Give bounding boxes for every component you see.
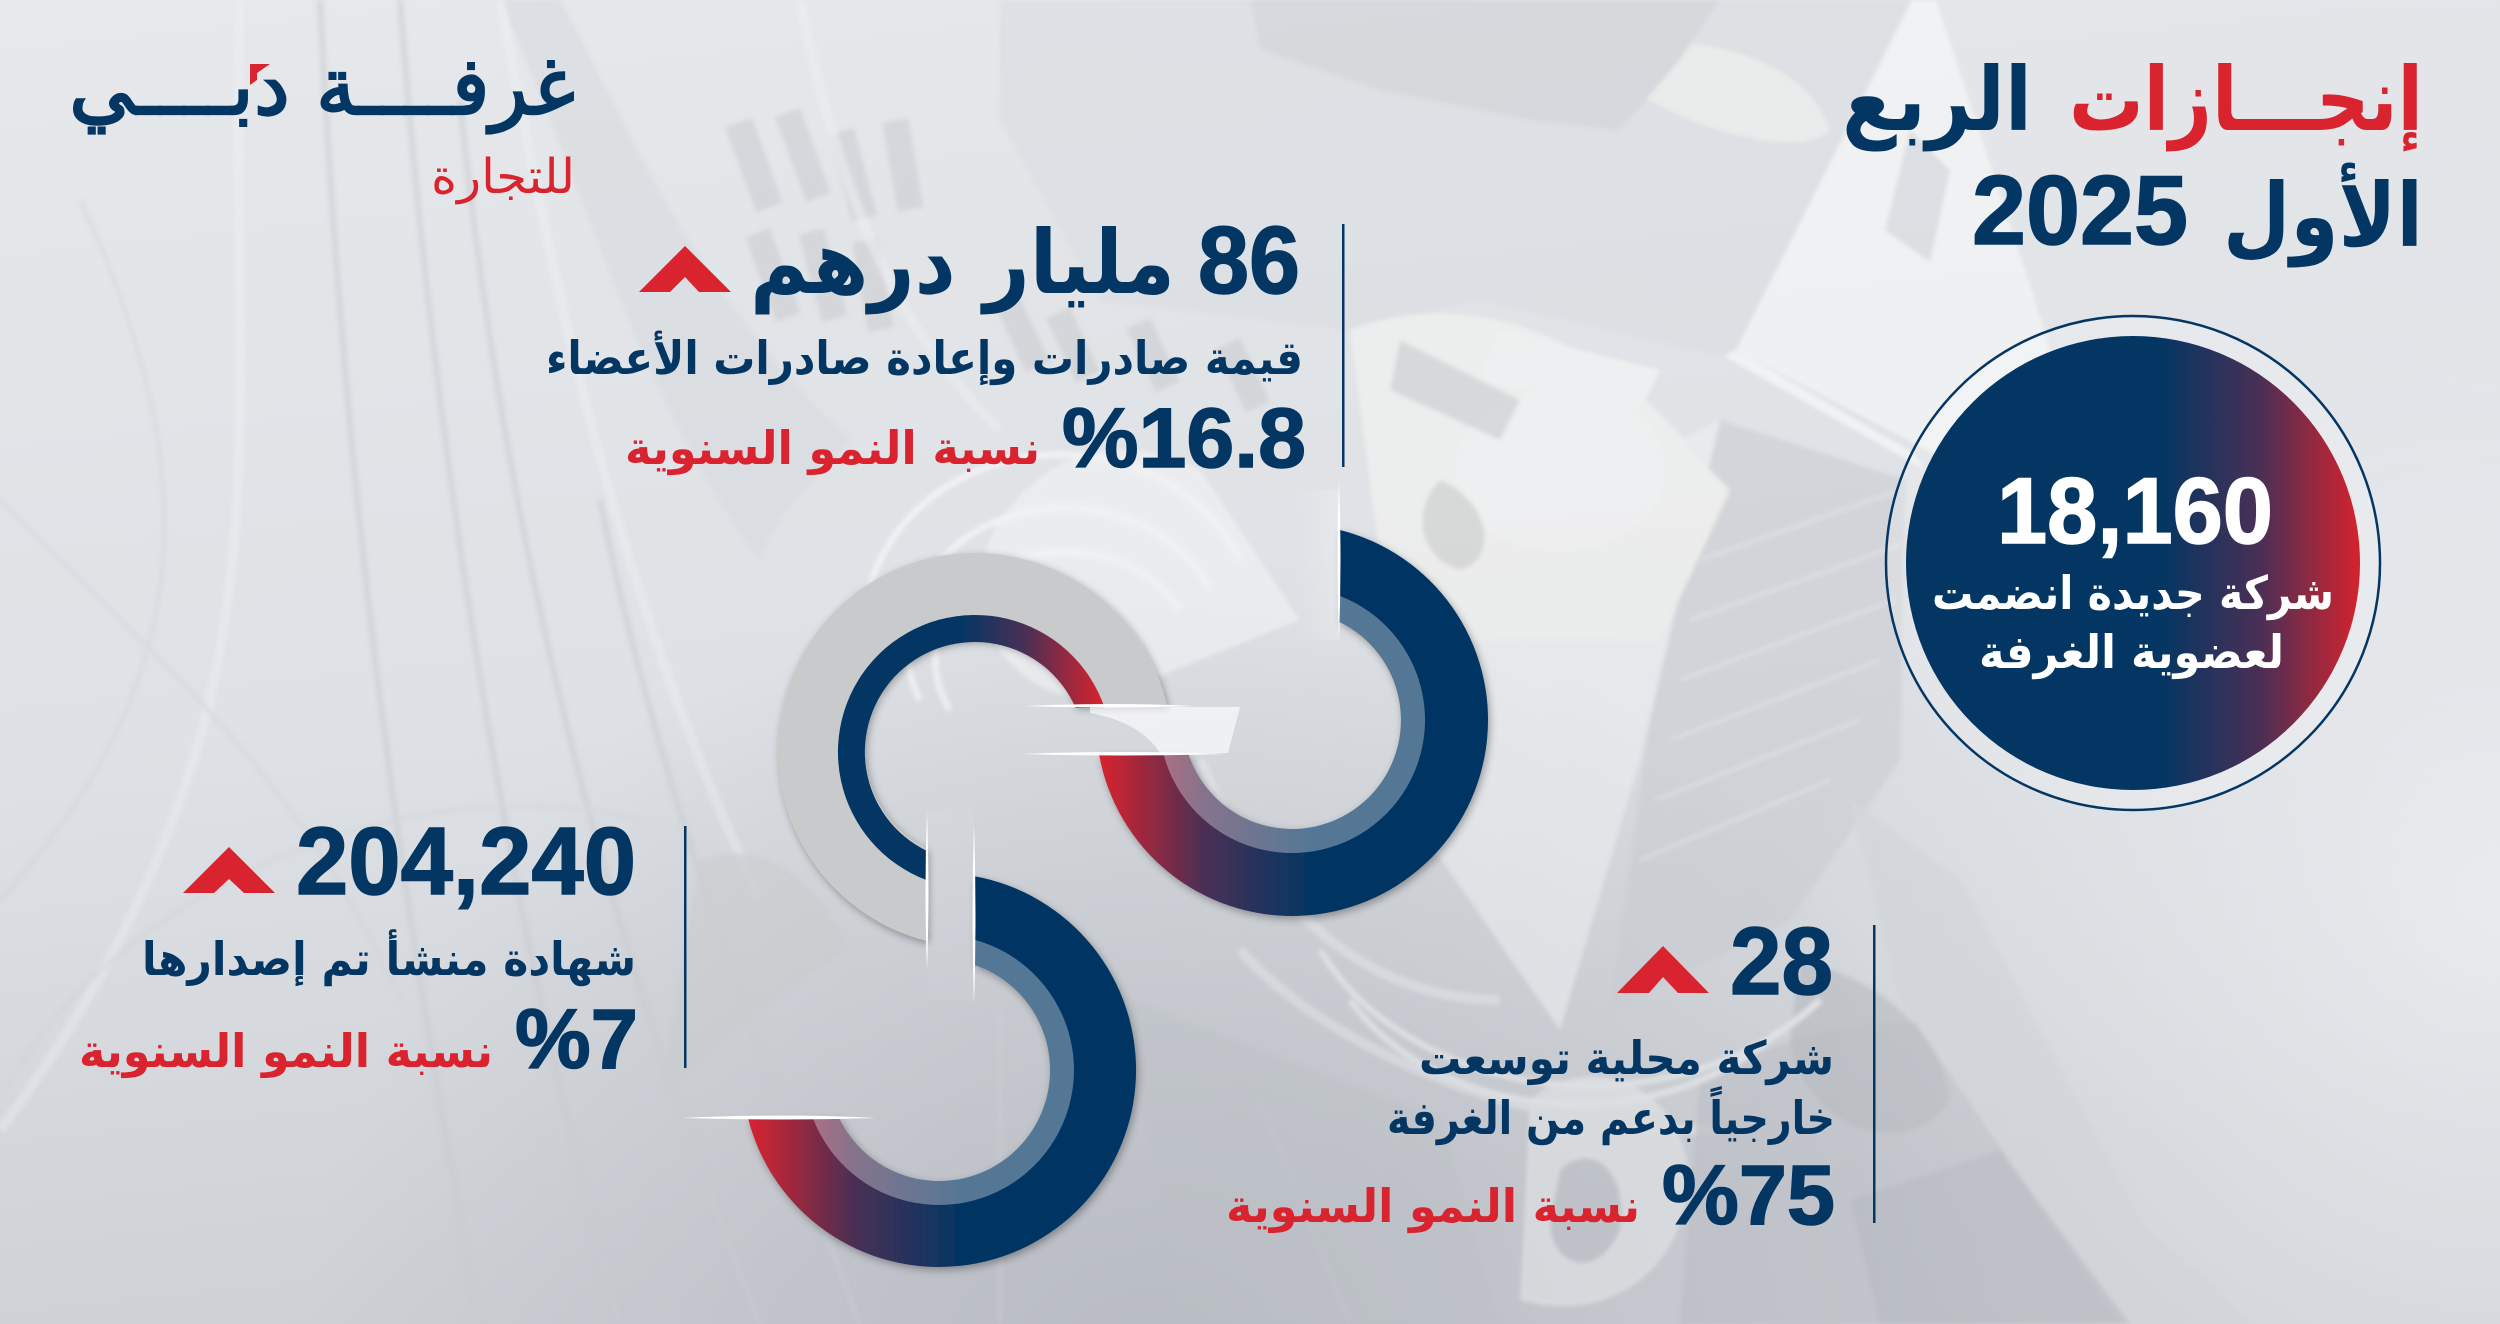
title: إنجـــازات <box>2069 48 2423 152</box>
stat block: certificates of origin: شهادة منشأ تم إصدارها <box>142 929 636 987</box>
title: الأول <box>2223 162 2423 268</box>
stat block: exports value: نسبة النمو السنوية <box>625 421 1040 475</box>
title <box>1842 48 2423 268</box>
stat block: exports value: مليار درهم <box>750 211 1175 315</box>
stat block: local companies expanded: شركة محلية توسعت <box>1419 1031 1834 1085</box>
stat block: local companies expanded: خارجياً بدعم من الغرفة <box>1387 1086 1835 1145</box>
logo: Dubai Chamber of Commerce: دبــــي <box>69 40 290 134</box>
stat circle: new member companies: شركة جديدة انضمت <box>1932 566 2334 620</box>
title: الربع <box>1842 48 2032 151</box>
stat block: certificates of origin <box>79 808 686 1086</box>
stat block: local companies expanded <box>1226 908 1876 1242</box>
stat block: local companies expanded: %75 <box>1662 1148 1835 1242</box>
stat block: certificates of origin: 204,240 <box>296 808 636 915</box>
stat block: certificates of origin: نسبة النمو السنوية <box>79 1024 493 1078</box>
stat circle: new member companies <box>1886 316 2380 810</box>
stat circle: new member companies: لعضوية الغرفة <box>1979 625 2284 679</box>
stat block: exports value <box>546 207 1344 485</box>
title: 2025 <box>1972 155 2188 265</box>
stat circle: new member companies: 18,160 <box>1997 458 2273 563</box>
stat block: certificates of origin: %7 <box>515 992 638 1086</box>
logo: Dubai Chamber of Commerce: للتجارة <box>431 149 575 205</box>
stat block: local companies expanded: 28 <box>1730 908 1833 1015</box>
stat block: exports value: 86 <box>1198 207 1300 314</box>
stat block: exports value: %16.8 <box>1062 391 1306 485</box>
linked rings graphic <box>682 480 1488 1267</box>
logo: Dubai Chamber of Commerce <box>69 40 575 205</box>
stat block: exports value: قيمة صادرات وإعادة صادرات الأعضاء <box>546 330 1303 386</box>
stat block: local companies expanded: نسبة النمو السنوية <box>1226 1179 1640 1233</box>
logo: Dubai Chamber of Commerce: غرفــــة <box>316 40 575 134</box>
